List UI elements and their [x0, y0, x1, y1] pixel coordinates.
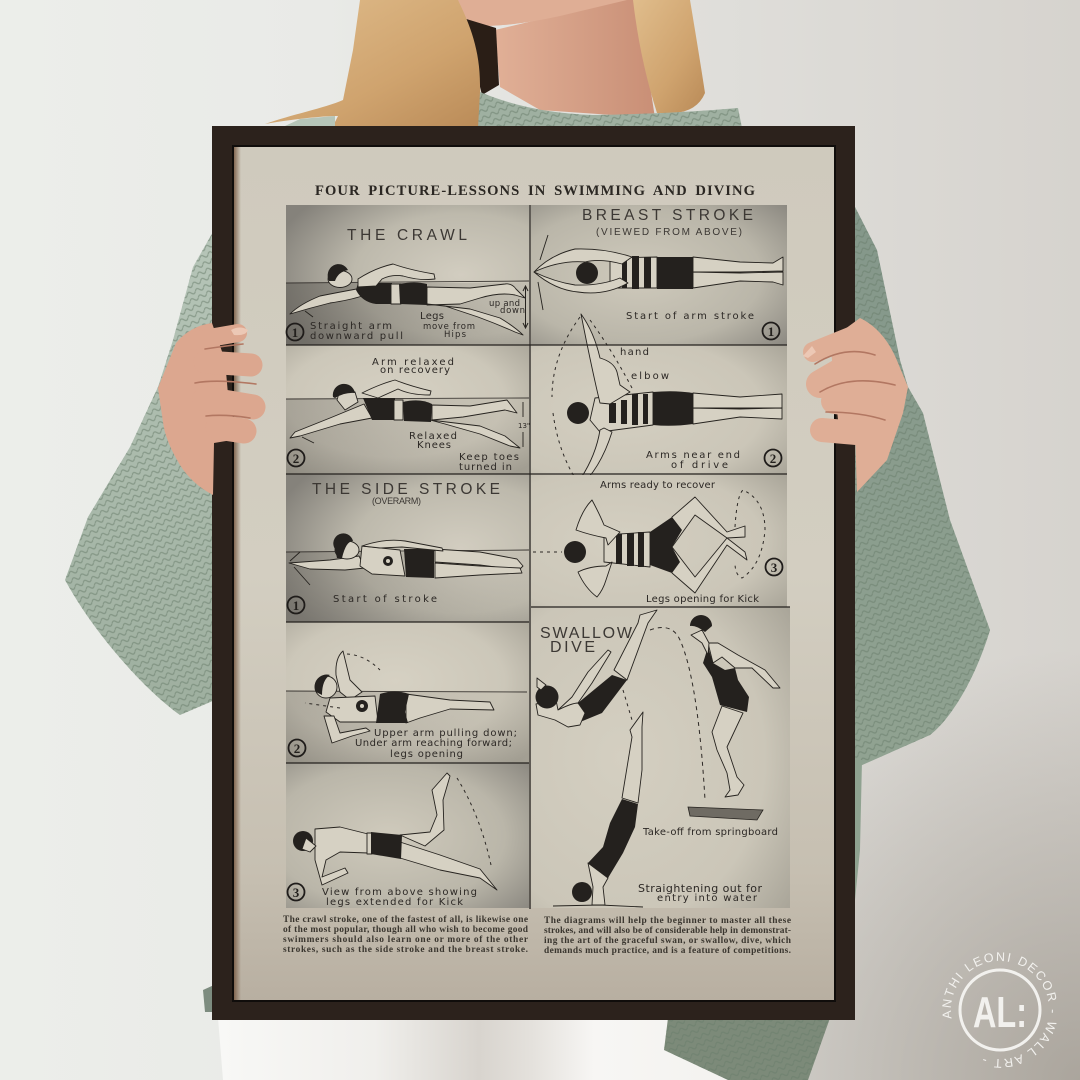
text block: crawl stroke description: The crawl stroke, one of the fastest of all, is likewise one: [283, 915, 528, 925]
hair shadow behind neck: [463, 18, 499, 95]
step number 1: [286, 324, 304, 340]
text block: crawl stroke description: strokes, such as the side stroke and the breast stroke.: [283, 945, 528, 955]
panel: the crawl step 2: [286, 345, 530, 474]
poster paper: [234, 147, 834, 1000]
heading: swallow dive: DIVE: [550, 639, 595, 656]
panel: breast stroke step 3: [531, 475, 787, 607]
text block: crawl stroke description: swimmers should also learn one or more of the other: [283, 935, 528, 945]
left sleeve: [65, 230, 215, 715]
step number 3: 3: [293, 885, 300, 900]
caption: straight arm downward pull: downward pull: [310, 331, 403, 342]
caption: up and down: up and: [489, 299, 520, 309]
subheading: overarm: (OVERARM): [372, 496, 421, 506]
measurement: 13 inches: 13": [518, 422, 530, 430]
caption: keep toes turned in: Keep toes: [459, 452, 519, 463]
text block: diagrams description: The diagrams will help the beginner to master all these: [544, 916, 791, 926]
caption: arms near end of drive: [646, 450, 740, 471]
step number 2: [764, 450, 782, 466]
step number 1: 1: [293, 598, 299, 613]
step number 3: [288, 884, 304, 900]
panel: swallow dive: [531, 607, 790, 908]
caption: arm relaxed on recovery: on recovery: [380, 365, 450, 376]
step number 2: 2: [770, 451, 776, 466]
sweater hem right: [664, 1018, 830, 1080]
text block: crawl stroke description: of the most popular, though all who wish to become good: [283, 925, 529, 935]
chin: [457, 0, 627, 26]
caption: relaxed knees: Relaxed: [409, 431, 457, 442]
caption: legs move from hips: Legs: [420, 311, 444, 322]
step number 1: [762, 322, 780, 340]
neck and chin: [457, 0, 655, 118]
caption: view from above: legs extended for Kick: [326, 897, 463, 908]
step number 2: 2: [294, 741, 300, 756]
arrow: dive trajectory: [650, 628, 705, 800]
figure: diver in mid-air: [536, 610, 657, 727]
figure: breast stroke swimmer 2: [552, 314, 782, 488]
text block: diagrams description: [544, 916, 792, 956]
caption: keep toes turned in: [459, 452, 519, 473]
logo ring text: ANTHI LEONI DECOR - WALL ART -: [942, 952, 1056, 1068]
step number 2: 2: [293, 451, 299, 466]
figure: side stroke swimmer 2: [305, 651, 494, 743]
caption: upper arm pulling down: [355, 728, 517, 760]
measurement: 13 inches: [518, 402, 530, 447]
sweater hem left: [203, 985, 214, 1012]
caption: arm relaxed on recovery: Arm relaxed: [372, 357, 454, 368]
figure: side stroke swimmer 3: [293, 773, 497, 890]
sweater collar: [478, 92, 742, 128]
left shoulder patch: [285, 116, 335, 128]
panel: the crawl step 1: [286, 205, 529, 345]
text block: diagrams description: strokes, and will also be of considerable help in demonstrat-: [544, 926, 791, 936]
figure: diver entering water: [553, 712, 643, 907]
logo: Anthi Leoni Decor Wall Art: [942, 952, 1056, 1068]
figure: breast stroke swimmer 1: [534, 235, 783, 310]
arrow: up and down: [523, 286, 528, 328]
panel dividers: [286, 205, 790, 909]
text block: crawl stroke description: [283, 915, 529, 955]
caption: upper arm pulling down: Upper arm pulling down;: [374, 728, 517, 739]
caption: upper arm pulling down: legs opening: [390, 749, 463, 760]
right sleeve: [852, 203, 990, 766]
text block: diagrams description: demands much practice, and is a feature of competitions.: [544, 946, 791, 956]
caption: legs opening for kick: Legs opening for Kick: [646, 594, 759, 605]
caption: relaxed knees: [409, 431, 457, 451]
caption: arms near end of drive: of drive: [671, 460, 728, 471]
step number 1: 1: [768, 324, 774, 339]
caption: elbow: elbow: [631, 371, 669, 382]
heading: swallow dive: [540, 625, 633, 656]
caption: legs move from hips: [420, 311, 475, 340]
white trousers: [218, 1018, 740, 1080]
heading: the side stroke: THE SIDE STROKE: [312, 481, 500, 498]
panel: side stroke step 3: [286, 763, 529, 908]
left hand holding frame: [158, 323, 256, 495]
caption: view from above: [322, 887, 477, 908]
caption: up and down: [489, 299, 525, 316]
step number 1: [288, 596, 304, 614]
springboard: [688, 807, 763, 820]
figure: crawl swimmer 1: [290, 264, 525, 335]
panel: side stroke step 2: [286, 622, 529, 763]
sweater side right: [852, 760, 862, 930]
text block: diagrams description: ing the art of the graceful swan, or swallow, dive, which: [544, 936, 792, 946]
figure: side stroke swimmer 1: [289, 533, 523, 585]
heading: breast stroke: BREAST STROKE: [582, 207, 753, 224]
panel: breast stroke step 1: [531, 205, 787, 345]
hair, right side: [633, 0, 705, 113]
caption: take-off from springboard: Take-off from springboard: [642, 827, 778, 838]
caption: straightening out for entry into water: Straightening out for: [638, 882, 762, 895]
figure: crawl swimmer 2: [290, 380, 520, 448]
figure: breast stroke swimmer 3: [533, 490, 765, 597]
caption: hand: hand: [620, 347, 649, 358]
heading: swallow dive: SWALLOW: [540, 625, 633, 642]
caption: keep toes turned in: turned in: [459, 462, 512, 473]
panel: side stroke step 1: [286, 474, 529, 622]
caption: up and down: down: [500, 306, 525, 316]
caption: straightening out for entry into water: entry into water: [657, 893, 758, 904]
caption: start of arm stroke: Start of arm stroke: [626, 311, 754, 322]
caption: legs move from hips: Hips: [444, 330, 467, 340]
caption: straight arm downward pull: [310, 321, 403, 342]
subheading: viewed from above: (VIEWED FROM ABOVE): [596, 227, 742, 238]
right hand holding frame: [803, 318, 908, 492]
caption: straight arm downward pull: Straight arm: [310, 321, 392, 332]
caption: arms near end of drive: Arms near end: [646, 450, 740, 461]
step number 3: 3: [771, 560, 778, 575]
step number 2: [288, 450, 304, 466]
figure: diver standing on springboard: [690, 615, 780, 797]
caption: arm relaxed on recovery: [372, 357, 454, 376]
logo monogram: AL:: [973, 988, 1027, 1037]
heading: the crawl: THE CRAWL: [347, 227, 467, 244]
caption: relaxed knees: Knees: [417, 440, 451, 451]
caption: arms ready to recover: Arms ready to recover: [600, 480, 716, 491]
caption: upper arm pulling down: Under arm reaching forward;: [355, 738, 512, 749]
step number 3: [766, 558, 782, 576]
step number 2: [288, 740, 306, 756]
caption: straightening out for entry into water: [638, 882, 762, 904]
panel: breast stroke step 2: [531, 314, 787, 488]
caption: start of stroke: Start of stroke: [333, 594, 437, 605]
caption: view from above: View from above showing: [322, 887, 477, 898]
caption: legs move from hips: move from: [423, 322, 475, 332]
poster frame: [212, 126, 855, 1020]
title: FOUR PICTURE-LESSONS IN SWIMMING AND DIVING: [315, 183, 755, 199]
hair, left side: [265, 0, 492, 126]
step number 1: 1: [292, 325, 298, 340]
